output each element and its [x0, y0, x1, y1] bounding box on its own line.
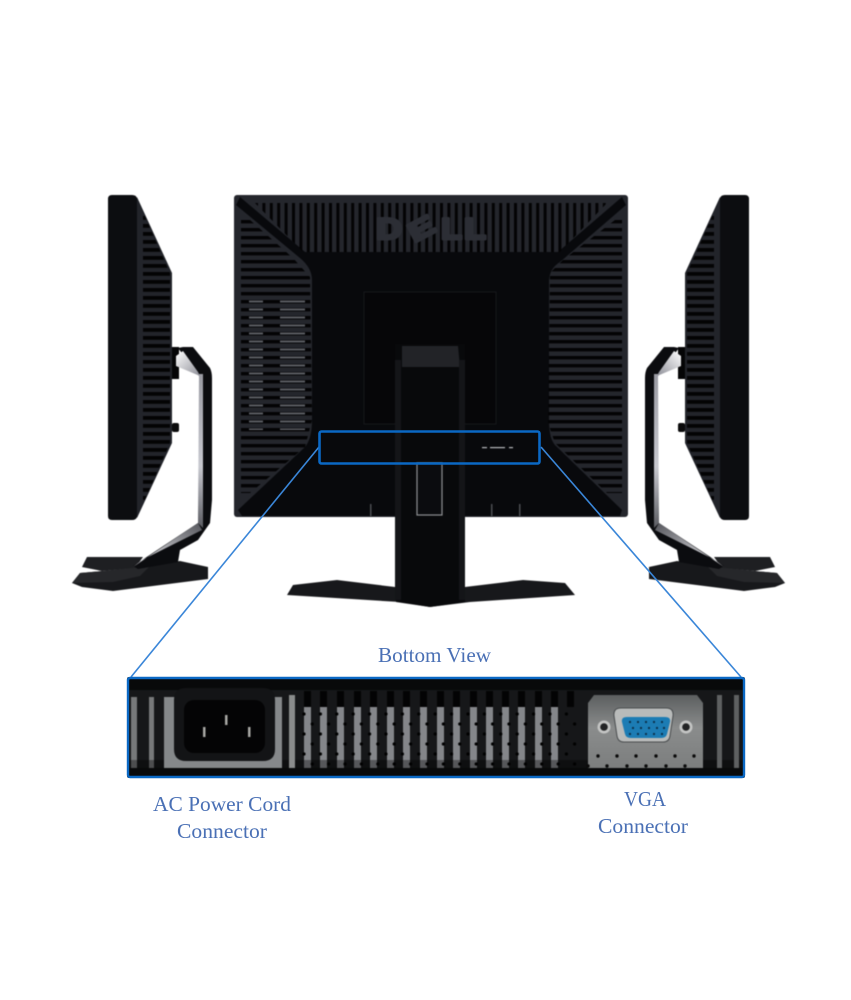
- rear view of monitor: [234, 195, 628, 607]
- AC power cord label: Connector: [177, 819, 267, 843]
- plate dots: [586, 754, 696, 768]
- DELL logo: E: [403, 210, 440, 248]
- neck cable slot: [417, 463, 442, 515]
- panel background: [127, 677, 745, 778]
- AC power cord label: [153, 792, 291, 843]
- left vent slots: [241, 220, 312, 493]
- port highlights in highlighted area: [482, 447, 513, 448]
- grey surround of power socket: [164, 697, 282, 768]
- VGA pins: [629, 721, 665, 735]
- VESA mount square: [364, 292, 496, 424]
- VGA connector blue insert: [622, 717, 670, 738]
- neck top highlight: [402, 346, 460, 367]
- right edge slots: [717, 695, 739, 768]
- highlight box on monitor: [320, 432, 540, 464]
- VGA connector label: Connector: [598, 814, 688, 838]
- socket inner recess: [184, 700, 265, 753]
- left side view of monitor: [72, 195, 212, 591]
- vent slots: [304, 707, 558, 768]
- DELL logo: D: [376, 213, 402, 246]
- neck side edges: [395, 360, 465, 600]
- callout lines: [131, 447, 741, 677]
- VGA right screw: [680, 720, 692, 734]
- slot tops: [304, 691, 574, 707]
- slot with screw next to power socket: [289, 695, 295, 768]
- panel lower shade band: [129, 760, 743, 768]
- bottom view panel: [127, 677, 745, 778]
- panel border: [128, 678, 744, 777]
- vent dots: [300, 709, 580, 769]
- panel mid band: [129, 690, 743, 768]
- bottom view label: Bottom View: [378, 643, 492, 667]
- stand base: [287, 580, 575, 607]
- left edge slots: [131, 697, 154, 768]
- AC power cord label: AC Power Cord: [153, 792, 291, 816]
- VGA connector label: [598, 787, 688, 838]
- DELL logo: L: [464, 213, 486, 246]
- right vent slots: [548, 220, 622, 493]
- VGA connector shell: [614, 708, 673, 742]
- DELL logo: L: [441, 213, 462, 246]
- socket pins: [203, 715, 250, 737]
- stand neck: [395, 344, 465, 607]
- AC power socket: [174, 688, 275, 761]
- left vent lit slots: [249, 300, 305, 430]
- bottom tabs on casing: [370, 504, 520, 516]
- monitor back casing: [234, 195, 628, 517]
- VGA mounting plate: [588, 695, 703, 768]
- recessed centre of casing: [236, 197, 626, 516]
- VGA connector label: VGA: [624, 787, 667, 811]
- VGA left screw: [598, 720, 610, 734]
- top vent slots: [255, 203, 607, 252]
- DELL logo: [376, 210, 486, 248]
- right side view of monitor: [645, 195, 785, 591]
